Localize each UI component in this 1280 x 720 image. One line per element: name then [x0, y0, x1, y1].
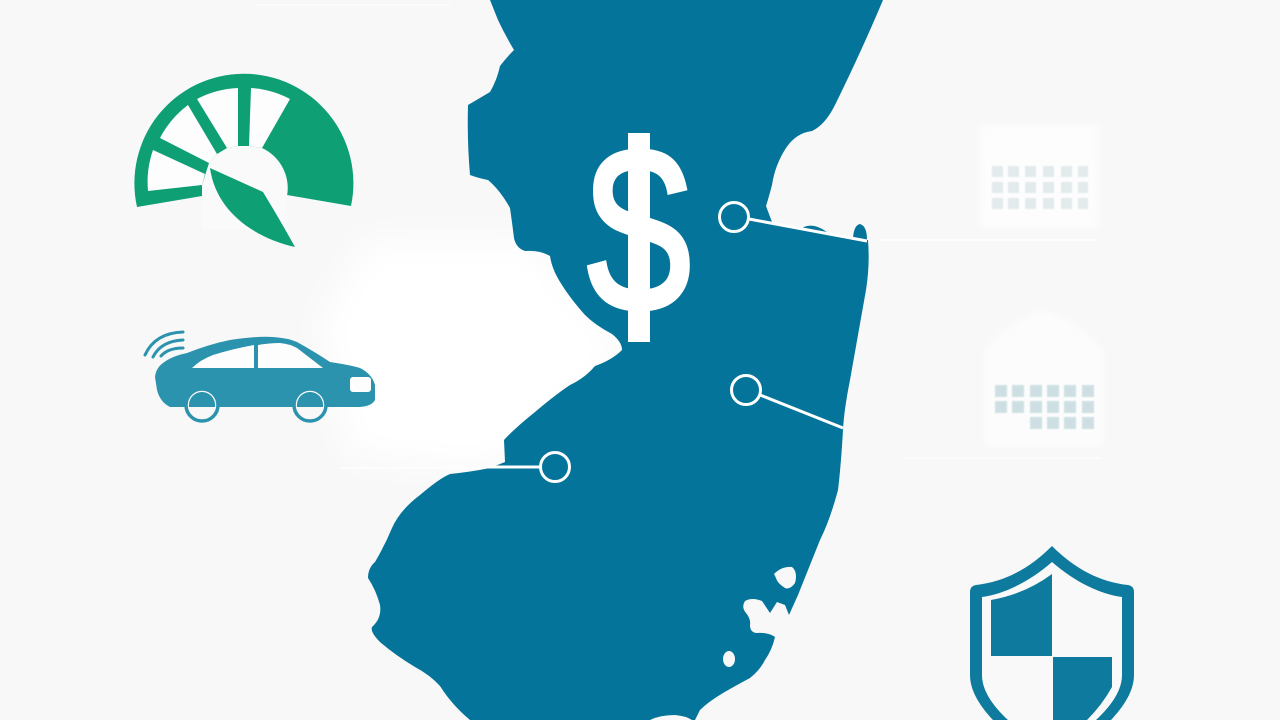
icon: faint calendar bottom — [985, 310, 1103, 447]
icon: credit score gauge — [134, 74, 353, 247]
callout: pin north — [720, 202, 867, 241]
icon: connected car — [145, 332, 375, 421]
map: state silhouette — [368, 0, 883, 720]
car: wireless signal waves — [145, 332, 183, 357]
callout: pin east — [732, 376, 843, 428]
map: northern bay notch bumps — [800, 224, 867, 240]
dollar sign: $ — [587, 98, 691, 362]
map: barrier island — [774, 567, 796, 588]
map: small inlet — [723, 651, 735, 667]
car: rear wheel — [186, 389, 218, 421]
icon: faint calendar top — [980, 125, 1098, 228]
car: front wheel — [294, 389, 326, 421]
map: bottom bay — [650, 715, 692, 720]
callout: pin west — [487, 452, 570, 482]
icon: shield — [970, 546, 1134, 720]
